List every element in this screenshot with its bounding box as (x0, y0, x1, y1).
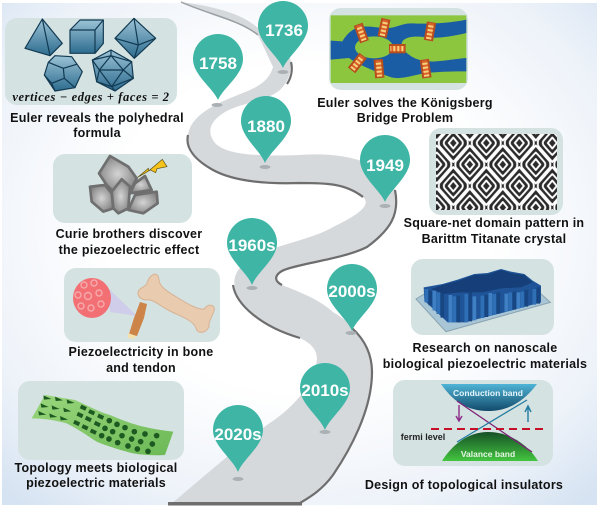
valence band: Valance band (461, 449, 515, 459)
heading: bone and tendon: and tendon (106, 361, 176, 375)
panel: Curie brothers (53, 154, 192, 223)
pin: 2020s: 2020s (214, 425, 262, 444)
pin: 1736: 1736 (265, 21, 303, 40)
panel: topological insulators band diagram (393, 380, 553, 466)
heading: Königsberg bridges: Bridge Problem (357, 111, 453, 125)
icon: tendon cross section (73, 278, 111, 318)
image: domain pattern (436, 134, 557, 210)
heading: topology meets biology: piezoelectric materials (26, 476, 166, 490)
heading: nanoscale materials: Research on nanoscale (413, 341, 557, 355)
map: bridges (348, 18, 436, 79)
map: island (355, 36, 393, 58)
panel: Königsberg bridges (329, 8, 468, 90)
pin: 2020s (213, 405, 263, 481)
valence band (442, 432, 538, 461)
pin: 2010s (300, 363, 350, 434)
icon: tendon (128, 302, 147, 339)
icon: lightning bolt (138, 159, 167, 177)
map: green land (331, 15, 466, 83)
heading: Curie brothers: Curie brothers discover (56, 227, 202, 241)
panel: topology meets biology (18, 381, 184, 460)
panel: polyhedral formula (5, 18, 177, 105)
conduction band (441, 384, 537, 411)
fermi level dashed line (431, 428, 547, 430)
pin: 2010s: 2010s (301, 381, 349, 400)
heading: square-net domain: Barittm Titanate crystal (422, 232, 566, 246)
arrow: blue up (525, 406, 531, 422)
icon: substrate plate (416, 292, 550, 332)
heading: Euler polyhedral formula: formula (73, 126, 122, 140)
icon: crystal cluster (90, 156, 158, 213)
heading: bone and tendon: Piezoelectricity in bone (69, 345, 213, 359)
heading: nanoscale materials: biological piezoelectric materials (383, 357, 587, 371)
heading: topological insulators: Design of topological insulators (365, 478, 563, 492)
pin: 1880: 1880 (247, 117, 285, 136)
arrow: purple down (456, 405, 462, 421)
fermi level label: fermi level (401, 432, 445, 442)
winding road (168, 2, 396, 506)
icon: nano blocks (424, 269, 541, 322)
icon: bone (138, 274, 214, 332)
icon: green patterned sheet (32, 395, 173, 455)
pin: 1949: 1949 (366, 156, 404, 175)
map: river (331, 20, 466, 78)
pin: 1758: 1758 (199, 54, 237, 73)
heading: Königsberg bridges: Euler solves the Königsberg (317, 96, 493, 110)
heading: square-net domain: Square-net domain pattern in (404, 216, 584, 230)
pin: 1960s (227, 218, 277, 290)
panel: square-net domain pattern (429, 128, 563, 215)
pin: 1949 (360, 135, 410, 208)
pin: 1758 (193, 34, 243, 107)
formula text: vertices − edges + faces = 2 (12, 90, 170, 104)
heading: Curie brothers: the piezoelectric effect (59, 243, 200, 257)
surface state lines (457, 400, 532, 452)
icon: polyhedra (25, 18, 156, 91)
pin: 1736 (258, 1, 308, 74)
pin: 1880 (241, 96, 291, 169)
panel: bone and tendon (64, 268, 220, 342)
heading: topology meets biology: Topology meets biological (15, 461, 177, 475)
panel: nanoscale materials (411, 259, 554, 335)
pin: 2000s: 2000s (328, 282, 376, 301)
pin: 1960s: 1960s (228, 236, 276, 255)
conduction band: Conduction band (453, 388, 523, 398)
pin: 2000s (327, 264, 377, 335)
heading: Euler polyhedral formula: Euler reveals the polyhedral (10, 111, 184, 125)
icon: magnifying cone (108, 288, 137, 316)
